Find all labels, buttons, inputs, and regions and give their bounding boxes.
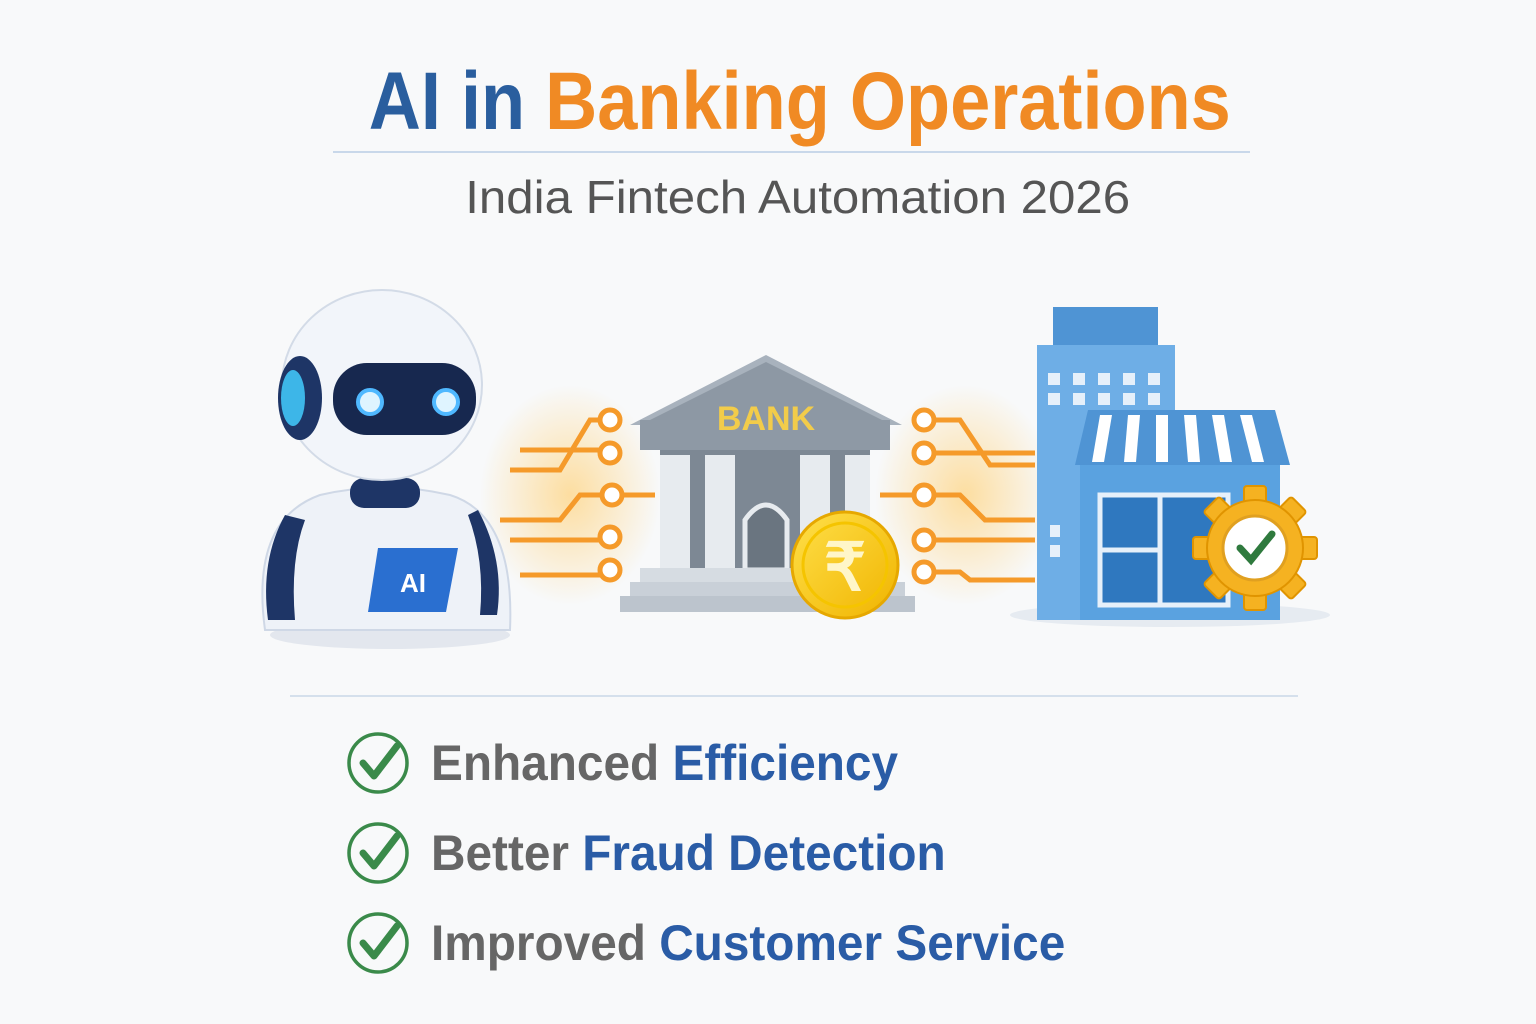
coin: ₹ bbox=[824, 530, 866, 604]
item: efficiency: Enhanced Efficiency bbox=[431, 735, 898, 791]
item: fraud: Better Fraud Detection bbox=[431, 825, 946, 881]
building bbox=[1010, 307, 1330, 627]
robot: AI bbox=[400, 568, 426, 598]
bank: BANK bbox=[717, 400, 816, 438]
bank bbox=[620, 355, 915, 612]
checklist bbox=[347, 732, 1065, 974]
subtitle: India Fintech Automation 2026 bbox=[466, 171, 1130, 223]
gear bbox=[1193, 486, 1317, 610]
coin bbox=[792, 512, 898, 618]
robot bbox=[262, 290, 510, 649]
circuit lines bbox=[480, 385, 1055, 605]
title: AI in Banking Operations bbox=[369, 56, 1231, 147]
item: service: Improved Customer Service bbox=[431, 915, 1065, 971]
